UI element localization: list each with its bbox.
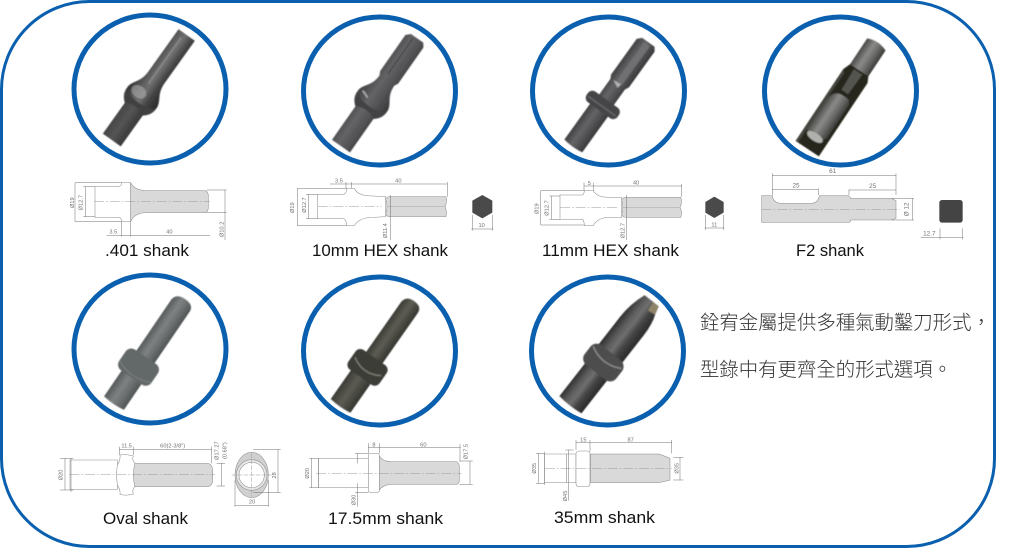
technical drawing: 11mm HEX shank xyxy=(534,181,682,240)
technical drawing: Oval shank: (0.68") xyxy=(223,442,229,459)
label: 11mm HEX shank: 11mm HEX shank xyxy=(542,242,680,260)
icon: hexagon section 11: 11 xyxy=(711,222,717,228)
technical drawing: 10mm HEX shank: Ø19 xyxy=(290,202,296,213)
technical drawing: 17.5mm shank xyxy=(305,442,473,507)
technical drawing: Oval shank: Ø17.27 xyxy=(215,441,221,460)
photo circle: .401 shank xyxy=(74,15,226,163)
panel: .401 shank xyxy=(70,15,227,260)
technical drawing: 17.5mm shank: 8 xyxy=(372,442,376,448)
label: 17.5mm shank: 17.5mm shank xyxy=(328,510,444,528)
photo circle: 17.5mm shank xyxy=(304,277,456,425)
panel: F2 shank xyxy=(762,17,963,260)
label: 35mm shank: 35mm shank xyxy=(554,509,656,527)
technical drawing: 17.5mm shank: 60 xyxy=(420,442,426,448)
technical drawing: .401 shank: 3.5 xyxy=(109,229,117,235)
technical drawing: 11mm HEX shank: 40 xyxy=(633,181,639,187)
technical drawing: 17.5mm shank: Ø30 xyxy=(352,495,358,505)
technical drawing: 10mm HEX shank: 40 xyxy=(395,178,401,184)
panel: 10mm HEX shank xyxy=(290,17,493,260)
technical drawing: 35mm shank: 87 xyxy=(628,438,634,444)
text block: company description: 銓宥金屬提供多種氣動鑿刀形式， xyxy=(700,312,991,334)
technical drawing: F2 shank: 25 xyxy=(869,183,877,190)
panel: 11mm HEX shank xyxy=(532,17,724,260)
technical drawing: .401 shank: Ø19 xyxy=(70,197,76,208)
diagram: oval cross-section: 20 xyxy=(249,500,255,506)
icon: hexagon section 11 xyxy=(705,197,724,230)
technical drawing: .401 shank: 40 xyxy=(166,229,172,235)
technical drawing: 10mm HEX shank: 3.5 xyxy=(335,178,343,184)
technical drawing: 10mm HEX shank: Ø11.4 xyxy=(383,223,389,238)
technical drawing: 10mm HEX shank: Ø12.7 xyxy=(302,197,308,213)
technical drawing: 11mm HEX shank: Ø12.7 xyxy=(620,223,626,238)
technical drawing: F2 shank: 61 xyxy=(829,168,837,175)
panel: 35mm shank xyxy=(532,277,684,527)
technical drawing: 17.5mm shank: Ø20 xyxy=(305,468,311,479)
photo circle: 10mm HEX shank xyxy=(304,17,456,165)
technical drawing: 11mm HEX shank: Ø19 xyxy=(534,203,540,214)
technical drawing: F2 shank xyxy=(762,168,914,222)
label: 10mm HEX shank: 10mm HEX shank xyxy=(312,242,449,260)
icon: square section 12.7 xyxy=(921,200,963,239)
panel: Oval shank xyxy=(58,275,281,528)
technical drawing: F2 shank: 25 xyxy=(792,182,800,189)
photo circle: Oval shank xyxy=(74,275,226,423)
technical drawing: Oval shank: Ø20 xyxy=(58,470,64,480)
technical drawing: 35mm shank: Ø35 xyxy=(532,463,538,474)
technical drawing: 10mm HEX shank xyxy=(290,178,447,240)
panel: 17.5mm shank xyxy=(304,277,473,528)
diagram: oval cross-section: 28 xyxy=(272,472,278,478)
label: Oval shank: Oval shank xyxy=(103,510,189,528)
technical drawing: 35mm shank xyxy=(532,438,683,501)
photo circle: 11mm HEX shank xyxy=(532,17,684,165)
technical drawing: .401 shank xyxy=(70,183,227,240)
icon: square section 12.7: 12.7 xyxy=(923,230,936,237)
label: .401 shank: .401 shank xyxy=(105,242,190,260)
text block: company description xyxy=(700,312,991,381)
technical drawing: Oval shank: 11.5 xyxy=(121,443,132,449)
technical drawing: Oval shank: 60(2-3/8") xyxy=(160,443,185,449)
technical drawing: .401 shank: Ø10.2 xyxy=(219,222,225,237)
technical drawing: .401 shank: Ø12.7 xyxy=(79,195,85,210)
icon: hexagon section 10 xyxy=(471,195,493,231)
photo circle: 35mm shank xyxy=(532,277,684,425)
photo circle: F2 shank xyxy=(764,17,916,165)
technical drawing: F2 shank: Ø 12 xyxy=(904,202,911,216)
icon: hexagon section 10: 10 xyxy=(479,223,485,229)
technical drawing: 11mm HEX shank: Ø12.7 xyxy=(544,200,550,216)
technical drawing: 35mm shank: Ø35 xyxy=(675,463,681,474)
technical drawing: 17.5mm shank: Ø17.5 xyxy=(463,444,469,459)
label: F2 shank: F2 shank xyxy=(796,242,865,260)
diagram: oval cross-section xyxy=(232,449,281,507)
technical drawing: 35mm shank: 15 xyxy=(580,438,586,444)
technical drawing: 35mm shank: Ø45 xyxy=(563,491,569,501)
text block: company description: 型錄中有更齊全的形式選項。 xyxy=(700,359,952,381)
technical drawing: 11mm HEX shank: 5 xyxy=(588,181,591,187)
technical drawing: Oval shank xyxy=(58,441,229,495)
